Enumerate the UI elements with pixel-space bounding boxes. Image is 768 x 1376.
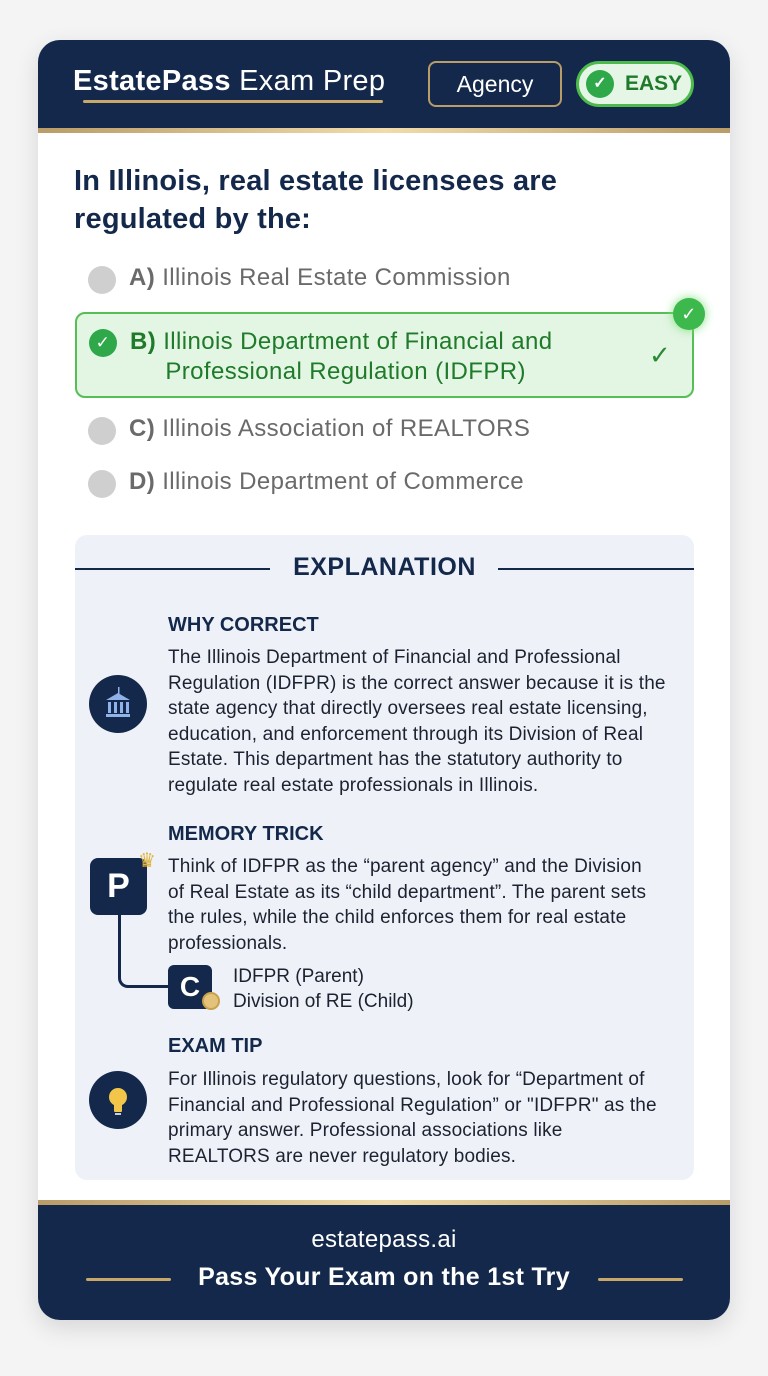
tag: easy: EASY [625,72,682,95]
footer [38,1200,730,1320]
option C [88,415,530,445]
text: A) Illinois Real Estate Commission [129,264,511,291]
text: D) Illinois Department of Commerce [129,468,524,495]
option B correct [75,312,694,398]
diagram: parent child: C [180,971,200,1002]
diagram: parent child: IDFPR (Parent) [233,966,364,987]
question: regulated by the: [74,203,311,235]
memory trick text: of Real Estate as its “child department”. The parent sets [168,882,646,902]
diagram: parent child [90,850,414,1012]
why correct text: The Illinois Department of Financial and Professional Regulation (IDFPR) is the correct answer because it is the state agency that directly oversees real estate licensing, education, and enforcement through its Division of Real Estate. This department has the statutory authority to regulate real estate professionals in Illinois. [168,647,666,796]
explanation panel [75,535,694,1180]
header [38,40,730,128]
option D [88,468,524,498]
exam tip heading: EXAM TIP [168,1035,262,1057]
tag: agency [428,61,562,107]
question [74,165,557,235]
icon: bulb [89,1071,147,1129]
option B correct: ✓ [681,304,697,324]
tag: agency: Agency [457,71,533,97]
diagram: parent child: P [107,867,130,905]
diagram: parent child: Division of RE (Child) [233,991,414,1012]
tag: easy [576,61,694,107]
option B correct: ✓ [649,340,671,370]
tag: easy: ✓ [593,75,607,92]
memory trick text [168,856,646,954]
memory trick text: Think of IDFPR as the “parent agency” and the Division [168,856,642,877]
explanation heading: EXPLANATION [293,553,476,581]
why correct heading: WHY CORRECT [168,614,319,636]
exam tip text: For Illinois regulatory questions, look for “Department of Financial and Professional Regulation” or "IDFPR" as the primary answer. Professional associations like [168,1069,657,1141]
text: C) Illinois Association of REALTORS [129,415,530,442]
icon: bank [89,675,147,733]
option A [88,264,511,294]
memory trick text: the rules, while the child enforces them for real estate professionals. [168,907,626,954]
footer tagline: Pass Your Exam on the 1st Try [198,1263,570,1291]
option B correct: ✓ [96,333,110,352]
exam tip text: REALTORS are never regulatory bodies. [168,1146,516,1166]
memory trick heading: MEMORY TRICK [168,823,324,845]
diagram: parent child: ♛ [138,850,156,872]
question: In Illinois, real estate licensees are [74,165,557,197]
option B correct: B) Illinois Department of Financial and [130,328,552,355]
footer url: estatepass.ai [311,1226,457,1253]
option B correct: Professional Regulation (IDFPR) [165,358,526,385]
brand title: EstatePass Exam Prep [73,65,385,97]
